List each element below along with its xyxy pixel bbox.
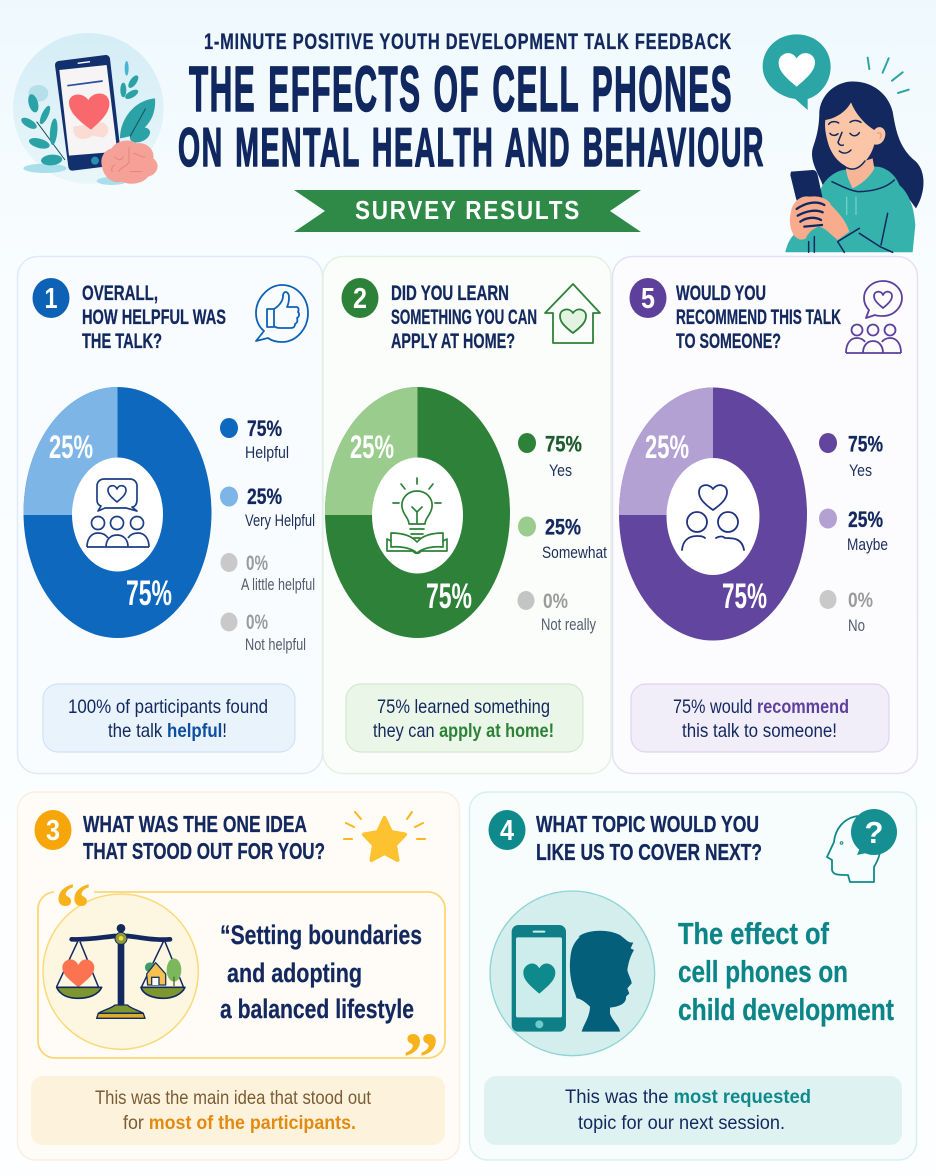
legend 1: Helpful xyxy=(245,444,289,462)
legend 2: Yes xyxy=(549,462,572,480)
question heading 5: WOULD YOU xyxy=(676,282,766,305)
callout 1: the talk helpful! xyxy=(108,720,227,742)
number badge 5: 5 xyxy=(641,283,655,315)
number badge 3 xyxy=(34,810,72,850)
question heading 5: RECOMMEND THIS TALK xyxy=(676,306,841,329)
number badge 2: 2 xyxy=(353,283,367,315)
quotation marks: “ xyxy=(55,868,91,948)
callout 3 xyxy=(31,1076,445,1145)
question heading 4 xyxy=(536,811,762,865)
icon: head with question bubble: ? xyxy=(865,815,883,850)
donut chart 2: 75% xyxy=(426,577,472,616)
donut chart 1: 75% xyxy=(126,574,172,613)
legend 5: Yes xyxy=(849,462,872,480)
legend 2: 75% xyxy=(545,432,582,456)
callout 2 xyxy=(346,684,583,752)
question heading 1: OVERALL, xyxy=(82,282,158,305)
callout 5: this talk to someone! xyxy=(682,720,837,742)
panel: question 4 xyxy=(470,792,916,1160)
illustration: phone with heart, leaves and brain xyxy=(13,33,164,185)
legend 2: Somewhat xyxy=(542,544,607,562)
quotation marks xyxy=(55,868,439,1098)
icon: brain xyxy=(101,141,158,184)
legend 1 xyxy=(220,416,315,654)
legend 5: No xyxy=(848,617,865,635)
question heading 3: WHAT WAS THE ONE IDEA xyxy=(83,811,307,837)
callout 4: topic for our next session. xyxy=(578,1112,785,1134)
callout 4: This was the most requested xyxy=(565,1086,811,1108)
icon: house with heart xyxy=(545,284,600,343)
callout 3: for most of the participants. xyxy=(123,1112,356,1134)
quote text: and adopting xyxy=(227,958,362,988)
legend 1: Not helpful xyxy=(245,636,306,654)
question heading 5 xyxy=(676,282,841,353)
donut chart 1: 25% xyxy=(49,429,93,465)
legend 2 xyxy=(518,432,607,634)
icon: audience with heart bubble xyxy=(87,479,149,547)
callout 1 xyxy=(43,684,295,752)
banner: survey results: SURVEY RESULTS xyxy=(355,197,581,225)
illustration: balance scale xyxy=(43,894,198,1049)
legend 1: 0% xyxy=(246,552,268,575)
legend 1: A little helpful xyxy=(241,576,315,594)
question heading 5: TO SOMEONE? xyxy=(676,330,781,353)
question heading 2: SOMETHING YOU CAN xyxy=(391,306,537,329)
icon: heart bubble above group xyxy=(846,281,902,353)
callout 2: they can apply at home! xyxy=(373,720,554,742)
number badge 1 xyxy=(32,278,70,318)
icon: thumbs up in speech bubble xyxy=(256,285,308,342)
panel: question 3 xyxy=(18,792,460,1160)
banner: survey results xyxy=(294,190,641,232)
number badge 4: 4 xyxy=(500,815,514,847)
quote box xyxy=(38,868,445,1098)
legend 2: 0% xyxy=(543,590,568,613)
callout 4 xyxy=(484,1076,902,1145)
illustration: woman with phone and heart bubble xyxy=(763,34,923,252)
callout 5 xyxy=(631,684,889,752)
question heading 3 xyxy=(83,811,325,864)
illustration: phone and child silhouette xyxy=(490,891,655,1056)
donut chart 1 xyxy=(24,387,212,638)
icon: two people with heart xyxy=(682,485,744,550)
icon: star with rays xyxy=(344,812,425,860)
number badge 1: 1 xyxy=(44,283,58,315)
number badge 3: 3 xyxy=(46,815,60,847)
legend 1: 25% xyxy=(247,484,282,509)
panel: question 2 xyxy=(323,256,611,774)
panel: question 5 xyxy=(612,256,918,774)
callout 2: 75% learned something xyxy=(377,696,550,718)
donut chart 2 xyxy=(325,387,510,638)
number badge 5 xyxy=(630,278,666,318)
quotation marks: ” xyxy=(403,1018,439,1098)
question heading 4: LIKE US TO COVER NEXT? xyxy=(536,839,762,865)
donut chart 5 xyxy=(619,388,807,640)
legend 1: 0% xyxy=(246,611,268,634)
quote text: “Setting boundaries xyxy=(220,920,422,950)
legend 1: Very Helpful xyxy=(245,512,315,530)
number badge 4 xyxy=(488,810,526,850)
legend 5: Maybe xyxy=(847,536,888,554)
panel: question 1 xyxy=(18,256,322,774)
legend 5: 75% xyxy=(848,432,883,456)
subtitle: 1-MINUTE POSITIVE YOUTH DEVELOPMENT TALK FEEDBACK xyxy=(204,29,732,54)
question heading 1 xyxy=(82,282,226,353)
legend 2: Not really xyxy=(541,616,597,634)
donut chart 5: 75% xyxy=(722,577,767,616)
question heading 4: WHAT TOPIC WOULD YOU xyxy=(536,811,759,837)
callout 3: This was the main idea that stood out xyxy=(95,1087,371,1109)
quote text: a balanced lifestyle xyxy=(220,994,414,1024)
donut chart 5: 25% xyxy=(645,429,689,465)
legend 5 xyxy=(819,432,888,635)
icon: head with question bubble xyxy=(827,809,897,882)
legend 5: 25% xyxy=(848,507,883,532)
question heading 2: APPLY AT HOME? xyxy=(391,330,515,353)
number badge 2 xyxy=(342,278,378,318)
quote text xyxy=(220,920,422,1024)
callout 5: 75% would recommend xyxy=(673,696,849,718)
donut chart 2: 25% xyxy=(350,429,394,465)
legend 5: 0% xyxy=(848,589,873,612)
icon: light bulb over open book xyxy=(387,478,447,553)
question heading 3: THAT STOOD OUT FOR YOU? xyxy=(83,838,325,864)
topic text: cell phones on xyxy=(678,955,848,989)
legend 1: 75% xyxy=(247,416,282,441)
question heading 1: THE TALK? xyxy=(82,330,162,353)
question heading 1: HOW HELPFUL WAS xyxy=(82,306,226,329)
legend 2: 25% xyxy=(545,514,581,540)
topic text xyxy=(678,917,894,1027)
header xyxy=(13,29,923,252)
question heading 2 xyxy=(391,282,537,353)
question heading 2: DID YOU LEARN xyxy=(391,282,509,305)
title xyxy=(178,53,765,178)
callout 1: 100% of participants found xyxy=(68,696,268,718)
topic text: The effect of xyxy=(678,917,830,951)
